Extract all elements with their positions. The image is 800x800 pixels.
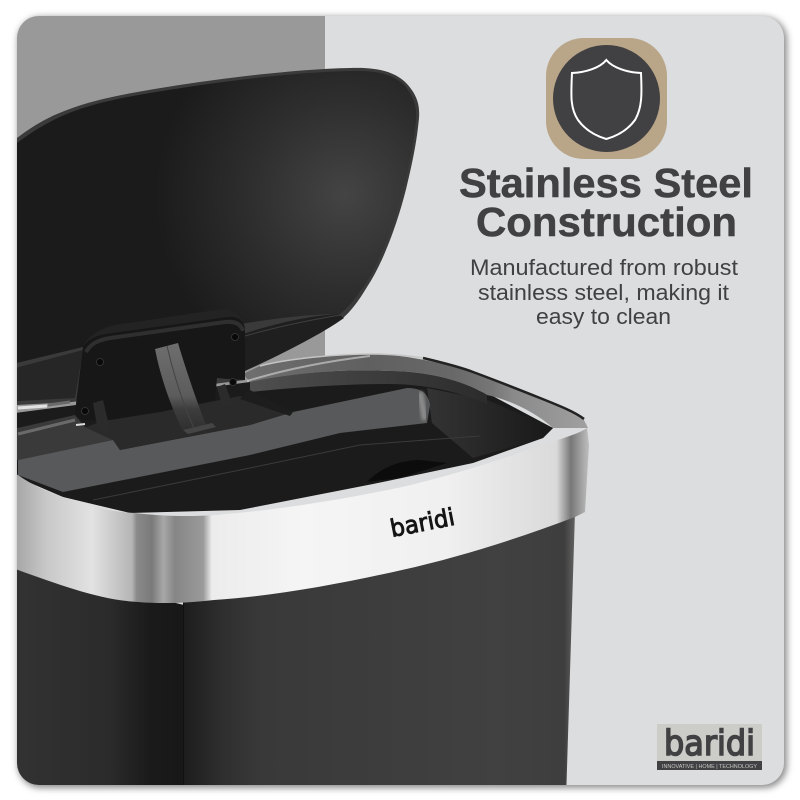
logo wordmark: baridi [664, 724, 755, 764]
pedal strap [155, 343, 206, 431]
bin interior [17, 382, 553, 513]
heading: Construction [476, 199, 737, 245]
back steel rim [243, 354, 588, 428]
strap foot [183, 423, 216, 434]
lid [0, 68, 419, 408]
bracket shoulder [244, 324, 245, 326]
logo strip [657, 761, 762, 770]
grey left background block [17, 16, 325, 416]
steel light streak [247, 356, 370, 381]
inner grey band [250, 370, 487, 400]
rim outer dark line [423, 358, 584, 419]
logo tagline: INNOVATIVE | HOME | TECHNOLOGY [662, 764, 757, 770]
heading [459, 160, 753, 245]
grey plateau [18, 388, 430, 492]
bin logo: baridi [388, 503, 457, 543]
heading: Stainless Steel [459, 160, 753, 206]
description text: stainless steel, making it [478, 280, 729, 305]
description text: Manufactured from robust [470, 255, 738, 280]
brand logo [657, 724, 762, 770]
icon circle [553, 45, 660, 152]
lid hinge bracket [75, 309, 245, 434]
icon tile [546, 38, 667, 159]
base plate [85, 396, 293, 450]
description text: easy to clean [536, 304, 671, 329]
lever foot [240, 389, 293, 416]
logo box [657, 724, 762, 762]
bracket plate [75, 317, 245, 420]
bin body [0, 512, 575, 800]
icon: shield badge [546, 38, 667, 159]
lid lower lip [243, 314, 344, 372]
icon: shield [571, 60, 641, 139]
lid inner face [0, 71, 416, 367]
left dark band [17, 415, 112, 460]
pit detail line [93, 436, 480, 500]
product photo: pedal bin [0, 68, 589, 800]
description text [470, 255, 738, 329]
front stainless steel rim band [0, 428, 589, 603]
pit bulge [367, 460, 447, 482]
bracket screws [82, 334, 238, 414]
hinge clips [93, 384, 230, 423]
lid outer shell [0, 68, 419, 406]
right inner wall [427, 388, 553, 458]
interior dark base [17, 382, 553, 513]
clip highlight [76, 424, 85, 425]
